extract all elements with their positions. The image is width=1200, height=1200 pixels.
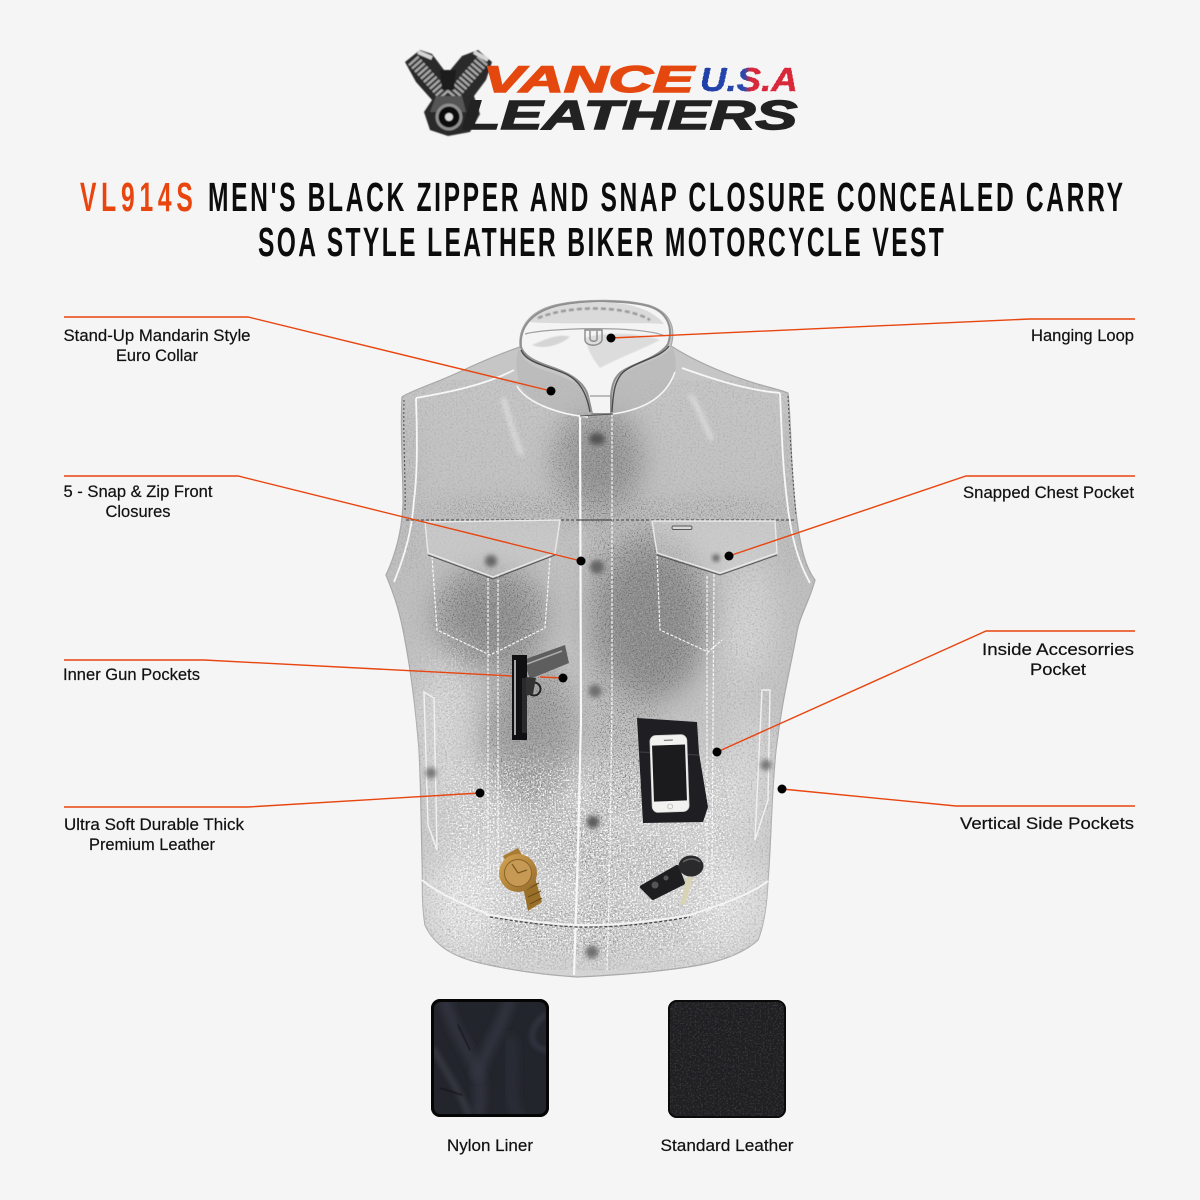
callout: front closures: 5 - Snap & Zip Front (64, 483, 213, 501)
title: product code: VL914S (80, 175, 193, 221)
swatch: standard leather (668, 1000, 786, 1118)
vest body (380, 300, 820, 980)
swatch label: standard leather: Standard Leather (660, 1137, 794, 1155)
icon: hanging loop (585, 330, 602, 345)
side pockets (424, 690, 770, 850)
callout: accessories pocket: Pocket (1030, 661, 1086, 679)
callout: chest pocket: Snapped Chest Pocket (963, 484, 1134, 502)
vest illustration (380, 300, 820, 980)
snaps (426, 433, 772, 958)
right chest pocket (652, 521, 777, 880)
logo word: LEATHERS: LEATHERS (462, 93, 798, 138)
callout: stand-up collar: Euro Collar (116, 347, 198, 365)
callout: accessories pocket: Inside Accesorries (982, 641, 1134, 659)
icon: gold watch (499, 848, 542, 911)
callout: chest pocket (724, 476, 1135, 560)
collar inner and neck opening (521, 301, 670, 414)
callout: premium leather: Ultra Soft Durable Thick (64, 816, 245, 834)
title: second line: SOA STYLE LEATHER BIKER MOTORCYCLE VEST (258, 220, 944, 266)
callout: inner gun pockets (63, 660, 568, 684)
callout: side pockets (778, 784, 1135, 833)
icon: car key fob (642, 856, 704, 905)
callout: stand-up collar: Stand-Up Mandarin Style (64, 327, 250, 345)
left chest pocket (425, 520, 560, 880)
swatch label: nylon liner: Nylon Liner (447, 1137, 534, 1155)
logo word: VANCE: VANCE (483, 59, 696, 100)
callout: premium leather (64, 788, 484, 854)
icon: pistol (512, 645, 569, 740)
callout: inner gun pockets: Inner Gun Pockets (63, 666, 200, 684)
yoke seam (406, 519, 796, 521)
callout: stand-up collar (64, 317, 556, 396)
chest creases (503, 395, 712, 455)
callout: premium leather: Premium Leather (89, 836, 215, 854)
swatch: nylon liner (431, 999, 549, 1118)
callout: front closures: Closures (106, 503, 170, 521)
icon: v-twin engine (405, 50, 492, 136)
logo word: USA: U.S.A (700, 61, 798, 98)
hem band (422, 880, 768, 927)
title: first line: MEN'S BLACK ZIPPER AND SNAP CLOSURE CONCEALED CARRY (208, 175, 1123, 221)
callout: accessories pocket (712, 631, 1135, 756)
placket (574, 414, 613, 975)
logo (405, 50, 798, 138)
shoulder seams (394, 368, 810, 583)
callout: front closures (64, 476, 586, 566)
callout: side pockets: Vertical Side Pockets (960, 815, 1134, 833)
title (80, 175, 1123, 266)
collar stand (516, 346, 676, 417)
callout: hanging loop: Hanging Loop (1031, 327, 1134, 345)
icon: black pouch with phone (637, 718, 708, 823)
callout: hanging loop (606, 319, 1135, 345)
